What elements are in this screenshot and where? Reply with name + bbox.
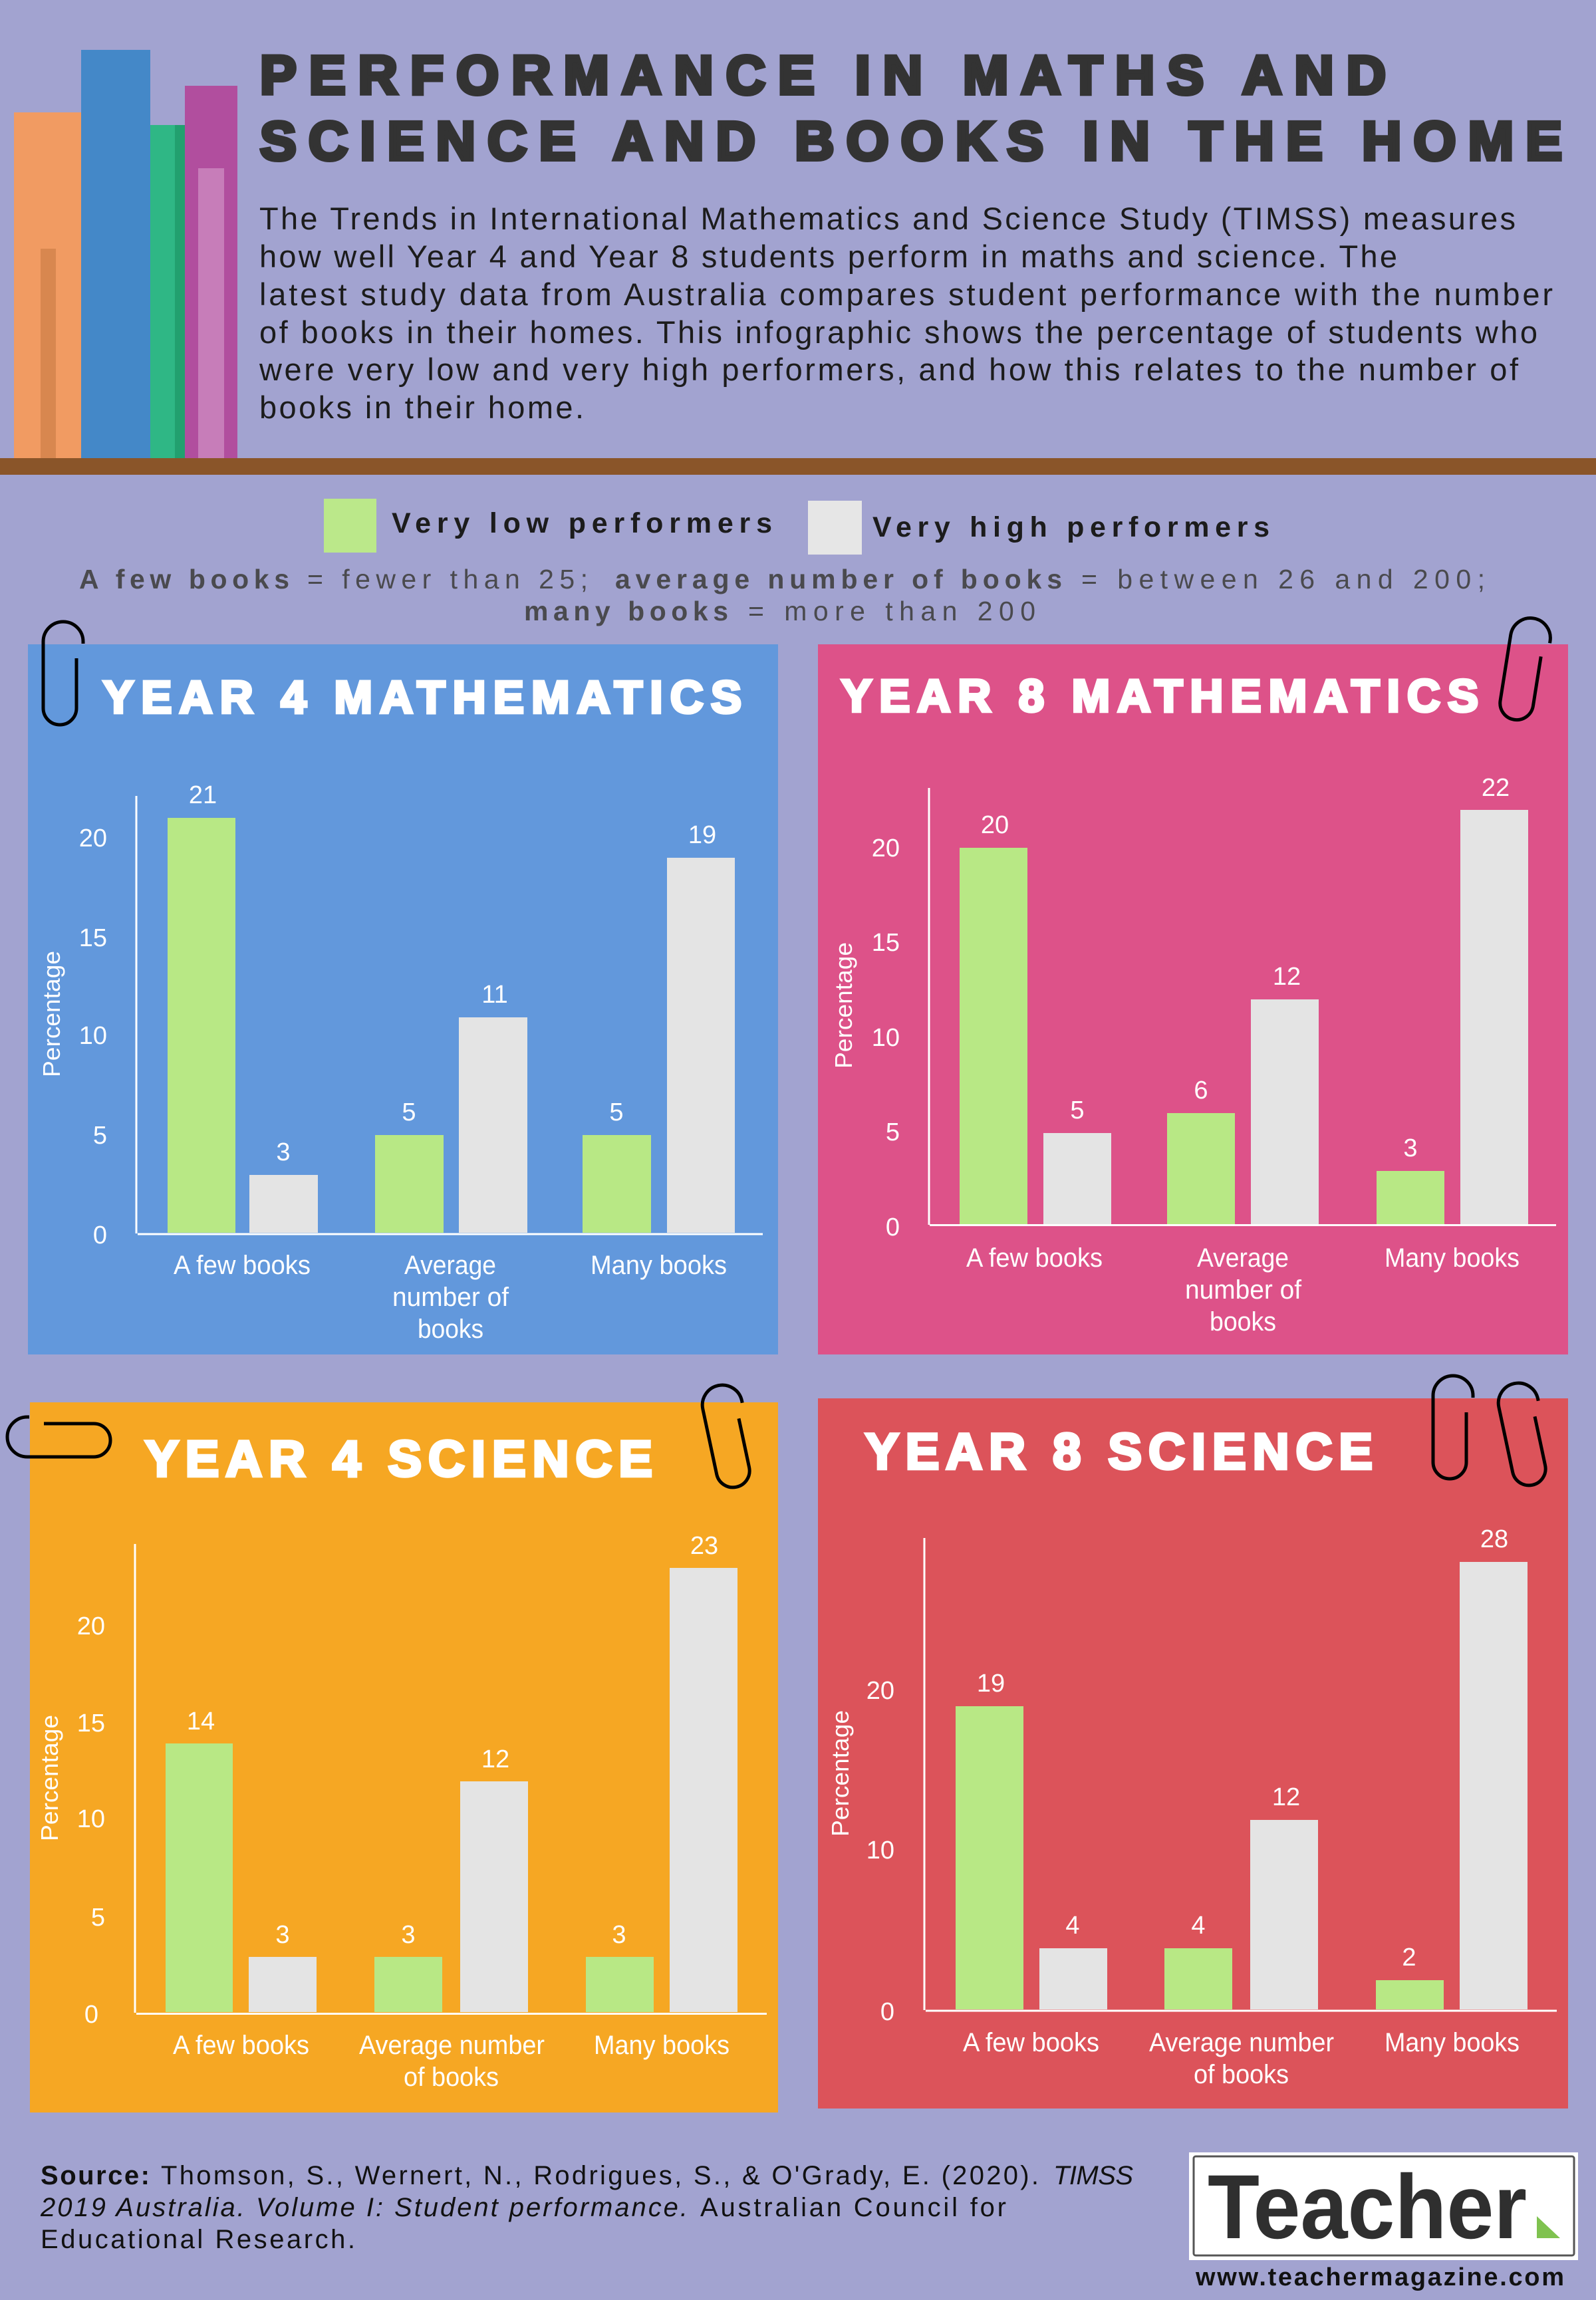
- y axis ticks: 20: [866, 1677, 894, 1705]
- y axis ticks: [79, 825, 107, 1249]
- y axis ticks: 20: [79, 825, 107, 852]
- bar: average, very high, 12: [1250, 1783, 1318, 2009]
- icon: paperclip: [43, 622, 83, 725]
- x axis labels: Many books: [1385, 1243, 1520, 1273]
- legend: [324, 499, 1269, 555]
- note: book count definitions: [79, 564, 1485, 626]
- bar: a few books, very high, 3: 3: [275, 1921, 290, 1949]
- icon: blue book: [81, 50, 150, 458]
- y axis ticks: 10: [866, 1837, 894, 1864]
- intro text block: were very low and very high performers, and how this relates to the number of: [259, 352, 1519, 387]
- icon: purple book: [185, 86, 237, 458]
- bar: many, very low, 5: 5: [609, 1098, 624, 1126]
- x axis labels: of books: [1194, 2060, 1289, 2089]
- y axis label: Percentage: [36, 1715, 63, 1841]
- x axis labels: Average number: [359, 2031, 545, 2060]
- x axis labels: books: [418, 1315, 483, 1344]
- bar: many, very high, 22: 22: [1482, 774, 1510, 802]
- shelf: [0, 458, 1596, 475]
- x axis labels: number of: [392, 1283, 509, 1312]
- bar: many, very high, 22: [1460, 774, 1528, 1224]
- bar: many, very low, 3: [586, 1921, 654, 2012]
- icon: green book: [150, 125, 185, 458]
- bar chart: year 4 mathematics: [38, 781, 763, 1344]
- x axis labels: [173, 2031, 730, 2092]
- source citation: 2019 Australia. Volume I: Student performance.: [40, 2193, 688, 2222]
- bar: many, very high, 23: [670, 1532, 737, 2012]
- bar: a few books, very high, 4: 4: [1065, 1912, 1080, 1940]
- title: PERFORMANCE IN MATHS AND: [260, 45, 1386, 106]
- source citation: Source:: [41, 2161, 150, 2190]
- source citation: Educational Research.: [41, 2225, 355, 2254]
- x axis labels: A few books: [174, 1251, 311, 1280]
- bar chart: year 4 science: [36, 1532, 767, 2092]
- bar: average, very high, 11: [459, 981, 527, 1233]
- bar: a few books, very high, 3: 3: [276, 1138, 291, 1166]
- axes: [135, 1544, 767, 2013]
- y axis label: Percentage: [830, 942, 857, 1069]
- bar: a few books, very high, 5: [1043, 1096, 1111, 1224]
- illustration: books on a shelf: [0, 50, 1596, 475]
- title: SCIENCE AND BOOKS IN THE HOME: [260, 111, 1562, 172]
- website url: www.teachermagazine.com: [1195, 2263, 1564, 2291]
- y axis ticks: 0: [880, 1998, 894, 2026]
- y axis label: Percentage: [827, 1710, 854, 1837]
- y axis ticks: 5: [91, 1904, 105, 1932]
- y axis ticks: 15: [77, 1710, 105, 1737]
- bar: many, very low, 2: 2: [1402, 1944, 1416, 1972]
- y axis ticks: 10: [77, 1805, 105, 1833]
- y axis ticks: 10: [872, 1024, 900, 1052]
- x axis labels: A few books: [966, 1243, 1103, 1273]
- y axis ticks: 5: [886, 1118, 900, 1146]
- bar: many, very high, 28: [1460, 1525, 1528, 2009]
- bar: many, very low, 3: 3: [612, 1921, 626, 1949]
- y axis ticks: 0: [93, 1221, 107, 1249]
- icon: paperclip left: [1433, 1376, 1473, 1479]
- bar: many, very low, 5: [583, 1098, 651, 1233]
- source citation: TIMSS: [1053, 2161, 1133, 2190]
- y axis label: Percentage: [38, 951, 65, 1077]
- panel: year 4 science: [7, 1381, 778, 2112]
- icon: orange book: [14, 112, 81, 458]
- bar: many, very high, 19: 19: [688, 821, 716, 849]
- heading: year 4 science: YEAR 4 SCIENCE: [145, 1431, 652, 1487]
- bar: average, very high, 11: 11: [481, 981, 508, 1009]
- y axis ticks: 20: [77, 1612, 105, 1640]
- y axis ticks: 0: [886, 1214, 900, 1241]
- source citation: [40, 2161, 1133, 2254]
- x axis labels: Average number: [1149, 2028, 1334, 2057]
- intro text block: books in their home.: [259, 390, 584, 425]
- bar: a few books, very low, 20: [960, 811, 1027, 1224]
- intro text block: The Trends in International Mathematics and Science Study (TIMSS) measures: [259, 201, 1516, 236]
- x axis labels: [174, 1251, 727, 1344]
- bar: many, very high, 19: [667, 821, 735, 1233]
- bar: a few books, very low, 14: 14: [187, 1708, 215, 1735]
- bar: average, very low, 6: [1167, 1077, 1235, 1224]
- heading: year 4 mathematics: YEAR 4 MATHEMATICS: [103, 672, 741, 723]
- note: book count definitions: average number of books: [615, 564, 1062, 594]
- x axis labels: Many books: [591, 1251, 727, 1280]
- bar: many, very low, 3: 3: [1403, 1134, 1418, 1162]
- axes: [136, 796, 763, 1234]
- bar: a few books, very high, 3: [249, 1138, 318, 1233]
- intro text block: [259, 201, 1553, 425]
- bar: a few books, very low, 21: 21: [189, 781, 217, 809]
- x axis labels: A few books: [173, 2031, 309, 2060]
- bar: average, very low, 4: 4: [1191, 1912, 1206, 1940]
- legend label: very high performers: Very high performers: [872, 511, 1269, 543]
- panel: year 8 science: [818, 1376, 1568, 2108]
- bar: average, very low, 4: [1164, 1912, 1232, 2009]
- y axis ticks: 15: [79, 924, 107, 952]
- x axis labels: Many books: [1385, 2028, 1520, 2057]
- bar chart: year 8 science: [827, 1525, 1557, 2089]
- x axis labels: Many books: [594, 2031, 730, 2060]
- y axis ticks: [872, 834, 900, 1241]
- panel: year 4 mathematics: [28, 622, 778, 1354]
- intro text block: how well Year 4 and Year 8 students perform in maths and science. The: [259, 239, 1397, 274]
- legend swatch: very high performers: [808, 501, 862, 555]
- bar: a few books, very high, 5: 5: [1070, 1096, 1085, 1124]
- bar: average, very high, 12: 12: [1272, 1783, 1300, 1811]
- bar: average, very low, 6: 6: [1194, 1077, 1208, 1104]
- note: book count definitions: many books: [524, 596, 728, 626]
- y axis ticks: 20: [872, 834, 900, 862]
- legend label: very low performers: Very low performers: [392, 507, 772, 539]
- bar: average, very low, 5: [375, 1098, 444, 1233]
- x axis labels: [966, 1243, 1520, 1337]
- note: book count definitions: = fewer than 25;: [307, 564, 588, 594]
- bar: a few books, very low, 21: [168, 781, 235, 1233]
- bar: average, very high, 12: 12: [481, 1745, 509, 1773]
- bar: many, very high, 23: 23: [690, 1532, 718, 1560]
- bar: a few books, very high, 3: [249, 1921, 317, 2012]
- y axis ticks: 15: [872, 929, 900, 957]
- bar: a few books, very high, 4: [1039, 1912, 1107, 2009]
- legend swatch: very low performers: [324, 499, 376, 553]
- bar: many, very low, 2: [1376, 1944, 1444, 2009]
- x axis labels: of books: [404, 2063, 499, 2092]
- y axis ticks: 10: [79, 1022, 107, 1050]
- note: book count definitions: = more than 200: [748, 596, 1035, 626]
- y axis ticks: [866, 1677, 894, 2026]
- axes: [924, 1538, 1557, 2011]
- bar: a few books, very low, 19: [956, 1670, 1023, 2009]
- bar: a few books, very low, 14: [166, 1708, 233, 2012]
- intro text block: latest study data from Australia compares student performance with the number: [259, 277, 1553, 312]
- bar: a few books, very low, 19: 19: [977, 1670, 1005, 1698]
- heading: year 8 science: YEAR 8 SCIENCE: [865, 1424, 1373, 1480]
- logo: Teacher: Teacher: [1208, 2156, 1527, 2258]
- bar: average, very low, 5: 5: [402, 1098, 416, 1126]
- bar: many, very low, 3: [1377, 1134, 1444, 1224]
- note: book count definitions: = between 26 and 200;: [1081, 564, 1485, 594]
- icon: paperclip left: [7, 1417, 110, 1457]
- x axis labels: Average: [1197, 1243, 1289, 1273]
- title: [260, 45, 1562, 172]
- icon: paperclip right: [1495, 1379, 1555, 1489]
- source citation: Australian Council for: [700, 2193, 1006, 2222]
- icon: paperclip: [1498, 615, 1553, 723]
- x axis labels: A few books: [963, 2028, 1099, 2057]
- x axis labels: [963, 2028, 1520, 2089]
- y axis ticks: [77, 1612, 105, 2029]
- bar: many, very high, 28: 28: [1480, 1525, 1508, 1553]
- panel: year 8 mathematics: [818, 615, 1568, 1354]
- heading: year 8 mathematics: YEAR 8 MATHEMATICS: [841, 670, 1478, 721]
- source citation: Thomson, S., Wernert, N., Rodrigues, S., & O'Grady, E. (2020).: [161, 2161, 1039, 2190]
- axes: [929, 788, 1556, 1225]
- bar chart: year 8 mathematics: [830, 774, 1556, 1337]
- icon: paperclip right: [699, 1381, 759, 1491]
- bar: average, very low, 3: [374, 1921, 442, 2012]
- bar: average, very high, 12: 12: [1273, 963, 1301, 991]
- note: book count definitions: A few books: [79, 564, 289, 594]
- bar: a few books, very low, 20: 20: [981, 811, 1009, 839]
- x axis labels: number of: [1185, 1275, 1302, 1305]
- bar: average, very low, 3: 3: [401, 1921, 416, 1949]
- bar: average, very high, 12: [1251, 963, 1319, 1224]
- x axis labels: Average: [404, 1251, 496, 1280]
- y axis ticks: 5: [93, 1122, 107, 1150]
- intro text block: of books in their homes. This infographic shows the percentage of students who: [259, 315, 1537, 350]
- bar: average, very high, 12: [460, 1745, 528, 2012]
- x axis labels: books: [1210, 1307, 1276, 1337]
- y axis ticks: 0: [84, 2001, 98, 2029]
